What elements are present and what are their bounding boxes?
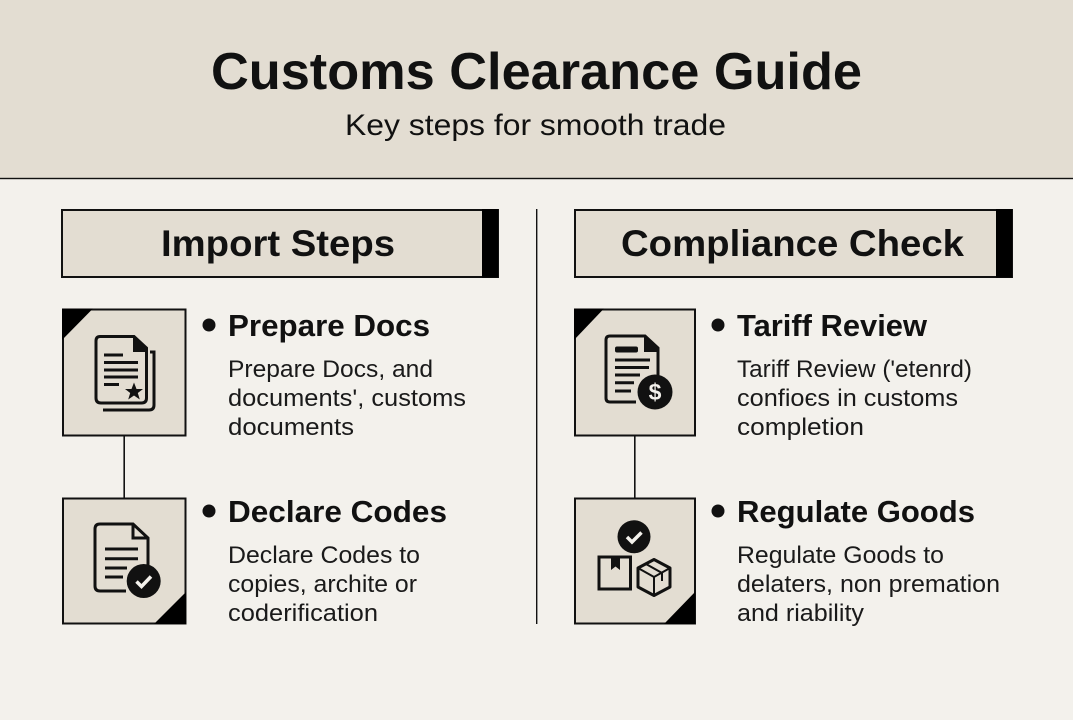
step: declare codes: copies, archite or: [228, 571, 417, 598]
step: prepare docs: documents: [228, 414, 354, 441]
center divider: [536, 209, 537, 624]
header band: [0, 0, 1073, 179]
step: regulate goods: Regulate Goods to: [737, 542, 944, 569]
panel: import steps heading: [62, 209, 498, 278]
step: declare codes: [202, 494, 447, 627]
icon: document with star: [62, 308, 186, 436]
connector: compliance: [634, 435, 636, 498]
step: prepare docs: documents', customs: [228, 385, 466, 412]
step: declare codes: coderification: [228, 600, 378, 627]
step: tariff review: confioєs in customs: [737, 385, 958, 412]
step: tariff review: [712, 308, 972, 441]
step: tariff review: completion: [737, 414, 864, 441]
step: declare codes: Declare Codes to: [228, 542, 420, 569]
icon: document with dollar: [574, 308, 695, 436]
panel: compliance check heading: [575, 209, 1012, 278]
icon: boxes with check: [575, 498, 695, 624]
step: declare codes: Declare Codes: [228, 494, 447, 529]
step: prepare docs: Prepare Docs: [228, 308, 430, 343]
step: regulate goods: Regulate Goods: [737, 494, 975, 529]
panel: compliance check heading: Compliance Check: [621, 223, 964, 264]
icon: document with dollar: $: [649, 379, 662, 405]
connector: import steps: [123, 435, 125, 498]
subtitle: Key steps for smooth trade: [345, 109, 726, 142]
step: prepare docs: [202, 308, 466, 441]
step: tariff review: Tariff Review ('etenrd): [737, 356, 972, 383]
title: Customs Clearance Guide: [211, 43, 862, 101]
icon: document with check: [63, 498, 186, 624]
step: tariff review: Tariff Review: [737, 308, 928, 343]
panel: import steps heading: Import Steps: [161, 223, 395, 264]
step: regulate goods: delaters, non premation: [737, 571, 1000, 598]
step: prepare docs: Prepare Docs, and: [228, 356, 433, 383]
step: regulate goods: [712, 494, 1000, 627]
step: regulate goods: and riability: [737, 600, 865, 627]
